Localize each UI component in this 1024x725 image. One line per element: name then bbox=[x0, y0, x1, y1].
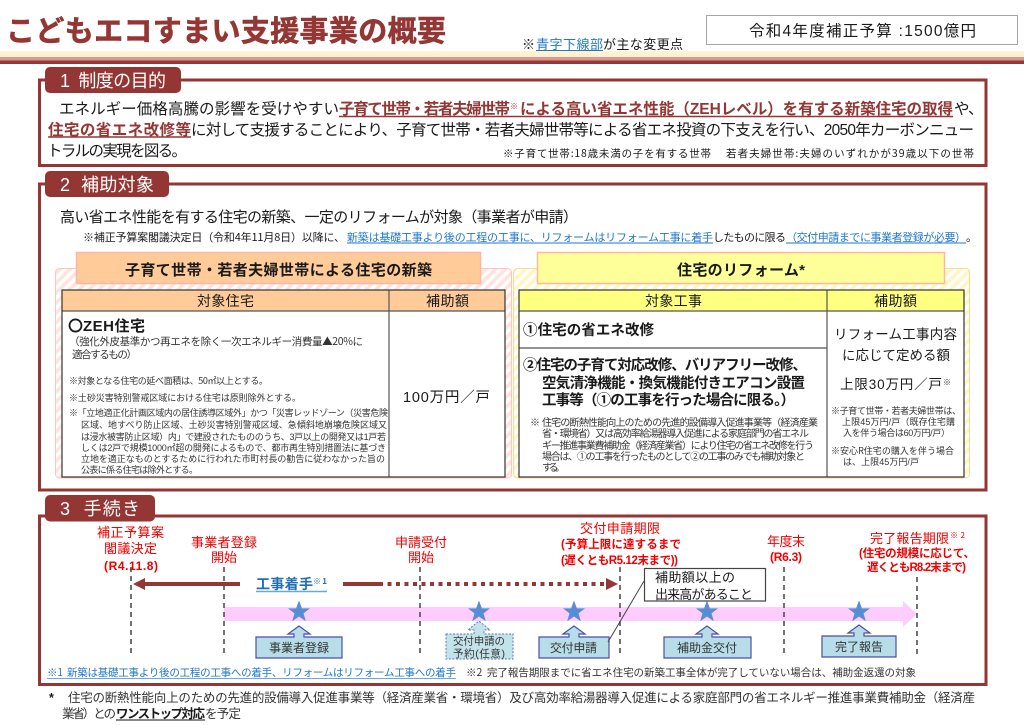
table: new housing: ※土砂災害特別警戒区域における住宅は原則除外とする。 bbox=[69, 391, 301, 404]
table: renovation: 工事等（①の工事を行った場合に限る。） bbox=[542, 389, 795, 410]
household definitions note: ※子育て世帯:18歳未満の子を有する世帯 bbox=[503, 146, 711, 161]
milestone: fiscal year end bbox=[767, 534, 805, 564]
heading: new housing bbox=[76, 252, 480, 284]
bottom note bbox=[49, 690, 975, 721]
table: renovation: 上限45万円/戸（既存住宅購 bbox=[842, 416, 955, 427]
label: construction start: 工事着手 bbox=[256, 576, 313, 592]
milestone: business registration start: 事業者登録 bbox=[191, 535, 257, 550]
arrow: construction start forward bbox=[343, 578, 618, 590]
table: new housing: ※対象となる住宅の延べ面積は、50㎡以上とする。 bbox=[69, 374, 268, 387]
table: renovation: ※ bbox=[530, 414, 540, 429]
table: renovation: ②住宅の子育て対応改修、バリアフリー改修、 bbox=[523, 354, 807, 375]
table: new housing: 〇 bbox=[68, 315, 83, 336]
budget box bbox=[706, 16, 1018, 44]
household definitions note: 若者夫婦世帯:夫婦のいずれかが39歳以下の世帯 bbox=[726, 146, 974, 161]
table: new housing: 立地を適正なものとするために行われた市町村長の勧告に従わなかった旨の bbox=[81, 453, 385, 464]
heading: section 1: 1 制度の目的 bbox=[60, 71, 166, 91]
table: renovation: ※ bbox=[943, 377, 951, 388]
step: application: 交付申請 bbox=[550, 641, 597, 655]
milestone: business registration start bbox=[191, 535, 257, 565]
timeline dashed markers bbox=[131, 567, 917, 657]
table: renovation: リフォーム工事内容 bbox=[834, 326, 958, 342]
callout: progress condition: 補助額以上の bbox=[655, 570, 735, 585]
procedure footnotes bbox=[47, 665, 916, 680]
purpose text: エネルギー価格高騰の影響を受けやすい bbox=[59, 100, 339, 118]
step: business registration bbox=[256, 626, 342, 658]
milestone: completion report deadline: 遅くともR8.2末まで) bbox=[867, 560, 966, 574]
table: renovation: する。 bbox=[542, 462, 565, 474]
table: new housing: ZEH住宅 bbox=[83, 317, 145, 335]
table: new housing: （強化外皮基準かつ再エネを除く一次エネルギー消費量▲20%に bbox=[69, 334, 363, 349]
callout: progress condition bbox=[608, 568, 766, 642]
table: renovation: 省・環境省）又は高効率給湯器導入促進による家庭部門の省エネル bbox=[542, 427, 809, 440]
table: renovation: ギー推進事業費補助金（経済産業省）により住宅の省エネ改修を行う bbox=[542, 439, 814, 452]
milestone: completion report deadline: (住宅の規模に応じて、 bbox=[859, 546, 975, 560]
eligibility note: 。 bbox=[966, 232, 977, 244]
milestone: application start: 申請受付 bbox=[395, 535, 447, 550]
stars bbox=[288, 600, 870, 621]
panel: renovation bbox=[514, 252, 970, 478]
step: reservation: 交付申請の bbox=[453, 634, 505, 648]
heading: new housing: 子育て世帯・若者夫婦世帯による住宅の新築 bbox=[125, 261, 432, 279]
header band bbox=[0, 51, 1024, 64]
purpose text: 、 bbox=[968, 101, 984, 118]
purpose text: に対して支援することにより、子育て世帯・若者夫婦世帯等による省エネ投資の下支えを行い、2050年カーボンニュー bbox=[191, 121, 974, 139]
arrow: construction start backward bbox=[133, 578, 240, 590]
step: application bbox=[539, 626, 609, 658]
milestone: application start bbox=[395, 535, 447, 565]
step: completion report bbox=[822, 625, 896, 657]
eligibility note bbox=[83, 229, 977, 245]
milestone: business registration start: 開始 bbox=[211, 550, 237, 565]
table: new housing: 補助額 bbox=[426, 293, 469, 309]
purpose text bbox=[47, 99, 984, 160]
milestone: application deadline: 交付申請期限 bbox=[580, 521, 660, 536]
step: reservation bbox=[446, 621, 513, 660]
table: renovation: 対象工事 bbox=[645, 293, 702, 309]
step: subsidy grant bbox=[664, 626, 751, 658]
procedure footnotes: ※1 新築は基礎工事より後の工程の工事への着手、リフォームはリフォーム工事への着手 bbox=[47, 665, 456, 680]
table: renovation: に応じて定める額 bbox=[842, 348, 950, 363]
household definitions note bbox=[503, 146, 974, 161]
milestone: fiscal year end: (R6.3) bbox=[770, 550, 802, 564]
table: renovation: は、上限45万円/戸 bbox=[843, 457, 919, 467]
step: subsidy grant: 補助金交付 bbox=[677, 641, 737, 655]
milestone: budget decision: 閣議決定 bbox=[104, 541, 157, 556]
table: new housing: 公表に係る住宅は除外とする。 bbox=[81, 464, 198, 475]
bottom note: を予定 bbox=[205, 707, 241, 721]
table: new housing: 100万円／戸 bbox=[403, 389, 490, 406]
change note: が主な変更点 bbox=[603, 37, 683, 52]
milestone: completion report deadline bbox=[859, 530, 975, 574]
title: こどもエコすまい支援事業の概要 bbox=[6, 15, 446, 48]
table: renovation bbox=[519, 290, 964, 477]
purpose text: 住宅の省エネ改修等 bbox=[48, 120, 191, 139]
heading: renovation: 住宅のリフォーム* bbox=[677, 261, 805, 279]
bottom note: 業省）との bbox=[62, 706, 116, 721]
table: new housing: しくは2戸で規模1000㎡超の開発によるもので、都市再生特別措置法に基づき bbox=[81, 442, 386, 453]
milestone: application deadline bbox=[561, 521, 681, 567]
milestone: completion report deadline: 完了報告期限 bbox=[870, 531, 949, 546]
table: renovation: 空気清浄機能・換気機能付きエアコン設置 bbox=[542, 374, 805, 392]
purpose text: や bbox=[954, 100, 970, 118]
milestone: budget decision: 補正予算案 bbox=[97, 525, 164, 540]
table: renovation: 場合は、①の工事を行ったものとして②の工事のみでも補助対象と bbox=[542, 448, 805, 463]
table: renovation: 補助額 bbox=[874, 293, 917, 309]
purpose text: による高い省エネ性能（ZEHレベル）を有する新築住宅の取得 bbox=[520, 99, 953, 118]
table: renovation: ①住宅の省エネ改修 bbox=[523, 319, 654, 340]
step: completion report: 完了報告 bbox=[835, 640, 883, 654]
table: renovation: 住宅の断熱性能向上のための先進的設備導入促進事業等（経済産業 bbox=[542, 416, 818, 429]
milestone: budget decision bbox=[97, 525, 164, 573]
heading: section 2: 2 補助対象 bbox=[60, 175, 154, 195]
label: construction start: ※1 bbox=[313, 576, 327, 587]
eligibility lead text: 高い省エネ性能を有する住宅の新築、一定のリフォームが対象（事業者が申請） bbox=[60, 208, 578, 226]
table: new housing: ※「立地適正化計画区域内の居住誘導区域外」かつ「災害レッドゾーン（災害危険 bbox=[69, 406, 388, 419]
milestone: application start: 開始 bbox=[408, 550, 434, 565]
bottom note: 住宅の断熱性能向上のための先進的設備導入促進事業等（経済産業省・環境省）及び高効率給湯器導入促進による家庭部門の省エネルギー推進事業費補助金（経済産 bbox=[68, 690, 975, 705]
heading: section 1 bbox=[45, 67, 181, 93]
table: renovation: 上限30万円／戸 bbox=[840, 377, 942, 392]
step: business registration: 事業者登録 bbox=[269, 640, 329, 655]
timeline band arrow bbox=[224, 601, 917, 627]
change note: 青字下線部 bbox=[536, 37, 603, 52]
table: new housing: 適合するもの） bbox=[72, 348, 137, 361]
milestone: application deadline: (予算上限に達するまで bbox=[561, 537, 681, 551]
milestone: fiscal year end: 年度末 bbox=[767, 534, 805, 549]
panel: section 2 eligibility bbox=[40, 171, 986, 490]
callout: progress condition: 出来高があること bbox=[655, 587, 753, 602]
eligibility note: 新築は基礎工事より後の工程の工事に、リフォームはリフォーム工事に着手 bbox=[347, 230, 713, 244]
eligibility note: （交付申請までに事業者登録が必要） bbox=[786, 230, 966, 244]
budget box: 令和4年度補正予算 :1500億円 bbox=[749, 21, 976, 40]
milestone: completion report deadline: ※2 bbox=[950, 530, 966, 541]
panel: section 1 purpose bbox=[40, 67, 986, 166]
milestone: budget decision: (R4.11.8) bbox=[104, 559, 158, 573]
table: renovation: ※安心R住宅の購入を伴う場合 bbox=[831, 444, 954, 457]
heading: renovation bbox=[538, 252, 944, 284]
procedure footnotes: ※2 完了報告期限までに省エネ住宅の新築工事全体が完了していない場合は、補助金返還の対象 bbox=[466, 665, 916, 680]
eligibility note: ※補正予算案閣議決定日（令和4年11月8日）以降に、 bbox=[83, 229, 345, 245]
panel: new housing bbox=[56, 252, 512, 478]
bottom note: ワンストップ対応 bbox=[116, 706, 205, 721]
change note bbox=[522, 34, 683, 53]
bottom note: * bbox=[49, 691, 54, 705]
table: new housing: 対象住宅 bbox=[197, 293, 254, 309]
table: renovation: 入を伴う場合は60万円/戸） bbox=[843, 427, 950, 438]
change note: ※ bbox=[522, 34, 535, 53]
purpose text: トラルの実現を図る。 bbox=[47, 142, 187, 160]
purpose text: ※ bbox=[510, 101, 518, 112]
table: new housing: 区域、地すべり防止区域、土砂災害特別警戒区域、急傾斜地崩壊危険区域又 bbox=[81, 419, 387, 430]
panel: section 3 procedure bbox=[40, 495, 986, 684]
table: renovation: ※子育て世帯・若者夫婦世帯は、 bbox=[831, 404, 961, 417]
table: new housing bbox=[62, 290, 505, 477]
step: reservation: 予約(任意) bbox=[453, 647, 505, 660]
eligibility note: したものに限る bbox=[713, 231, 786, 244]
heading: section 2 bbox=[45, 171, 169, 197]
heading: section 3: 3 手続き bbox=[60, 499, 140, 519]
milestone: application deadline: (遅くともR5.12末まで)) bbox=[561, 553, 678, 567]
purpose text: 子育て世帯・若者夫婦世帯 bbox=[339, 99, 510, 118]
table: new housing: は浸水被害防止区域）内」で建設されたもののうち、3戸以上の開発又は1戸若 bbox=[81, 431, 386, 442]
heading: section 3 bbox=[45, 495, 155, 522]
